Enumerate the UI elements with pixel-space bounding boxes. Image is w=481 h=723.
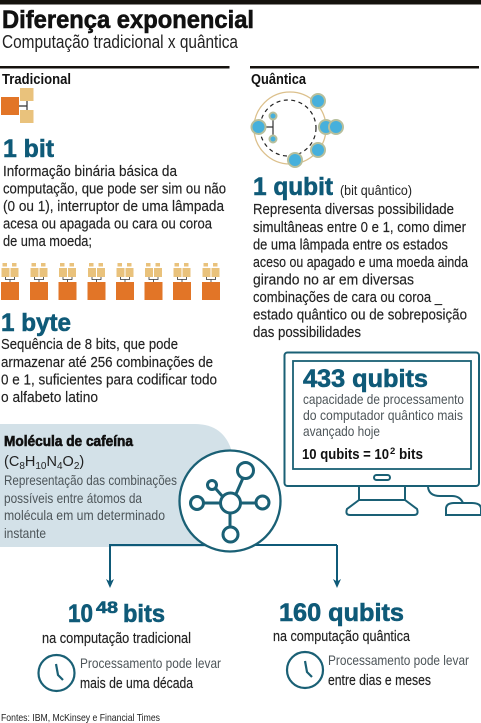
panel: monitor xyxy=(284,352,481,515)
text: traditional time xyxy=(80,655,221,692)
text: formula: O xyxy=(63,454,74,470)
heading: 10^48 bits: 48 xyxy=(96,598,118,617)
icon: clock xyxy=(38,655,74,691)
text: 1 bit description: acesa ou apagada ou cara ou coroa xyxy=(3,216,213,232)
text: formula: 4 xyxy=(57,461,63,472)
text: quantum time: entre dias e meses xyxy=(328,673,431,689)
heading: 1 byte: 1 byte xyxy=(1,309,71,337)
text: 1 bit description xyxy=(3,164,226,250)
text: 1 qubit description: combinações de cara ou coroa _ xyxy=(253,290,443,306)
text: 1 qubit description: simultâneas entre 0 e 1, como dimer xyxy=(253,220,466,236)
icon: eight bits row xyxy=(1,263,220,300)
top bar xyxy=(0,0,481,4)
text: formula: H xyxy=(25,454,35,470)
title: Diferença exponencial xyxy=(2,6,254,34)
text: equivalence: bits xyxy=(399,447,423,463)
panel: quantica xyxy=(250,66,479,341)
text: equivalence: 10 qubits = 10 xyxy=(302,447,389,463)
heading: 10^48 bits xyxy=(68,598,165,628)
heading: quantica: Quântica xyxy=(251,72,307,88)
icon: molecule xyxy=(180,450,280,552)
text: capacity: avançado hoje xyxy=(303,423,380,439)
text: 1 bit description: (0 ou 1), interruptor de uma lâmpada xyxy=(3,199,225,215)
icon: bit xyxy=(1,88,34,123)
text: caffeine description: molécula em um determinado xyxy=(4,507,165,523)
text: formula: ) xyxy=(79,454,84,470)
heading: 1 bit: 1 bit xyxy=(3,135,55,163)
text: 1 byte description xyxy=(1,337,217,406)
text: formula: (C xyxy=(4,454,19,470)
text: traditional label: na computação tradicional xyxy=(42,631,191,647)
text: 1 bit description: computação, que pode ser sim ou não xyxy=(3,182,226,198)
text: quantum time xyxy=(328,652,469,689)
text: bit quantico: (bit quântico) xyxy=(340,183,412,198)
heading: caffeine: Molécula de cafeína xyxy=(4,434,134,450)
text: 1 qubit description: girando no ar em diversas xyxy=(253,272,414,288)
heading: 1 qubit: 1 qubit xyxy=(253,173,334,201)
icon: qubit xyxy=(252,92,343,167)
text: 1 byte description: armazenar até 256 combinações de xyxy=(1,355,213,371)
text: caffeine description xyxy=(4,472,177,541)
text: traditional time: Processamento pode levar xyxy=(80,655,221,671)
text: 1 byte description: o alfabeto latino xyxy=(1,390,98,406)
text: 1 qubit description xyxy=(253,202,469,341)
icon: clock xyxy=(287,652,323,688)
arrows xyxy=(106,545,341,588)
heading: 10^48 bits: bits xyxy=(123,600,165,628)
text: formula: 10 xyxy=(35,461,47,472)
icon: monitor frame xyxy=(284,352,481,515)
panel: traditional result xyxy=(38,598,221,692)
text: 1 qubit description: de uma lâmpada entre os estados xyxy=(253,238,448,254)
text: equivalence: 2 xyxy=(390,446,395,457)
text: traditional time: mais de uma década xyxy=(80,676,194,692)
panel: quantum result xyxy=(273,599,469,689)
text: 1 byte description: Sequência de 8 bits, que pode xyxy=(1,337,178,353)
text: 1 bit description: Informação binária básica da xyxy=(3,164,178,180)
text: 1 qubit description: das possibilidades xyxy=(253,325,361,341)
heading: 433 qubits: 433 qubits xyxy=(303,365,428,393)
panel: caffeine xyxy=(0,424,232,547)
text: formula: 8 xyxy=(19,461,25,472)
heading: 10^48 bits: 10 xyxy=(68,600,93,628)
panel: tradicional xyxy=(0,66,230,406)
text: capacity xyxy=(303,391,464,439)
subtitle: Computação tradicional x quântica xyxy=(2,32,239,52)
text: formula: 2 xyxy=(74,461,80,472)
heading: tradicional: Tradicional xyxy=(2,72,71,88)
text: quantum label: na computação quântica xyxy=(273,629,411,645)
heading: 160 qubits: 160 qubits xyxy=(279,599,404,627)
text: 1 qubit description: Representa diversas possibilidade xyxy=(253,202,454,218)
text: caffeine description: instante xyxy=(4,525,46,541)
text: caffeine description: possíveis entre átomos da xyxy=(4,490,142,506)
text: 1 byte description: 0 e 1, suficientes para codificar todo xyxy=(1,372,217,388)
text: caffeine description: Representação das combinações xyxy=(4,472,177,488)
text: formula: N xyxy=(46,454,57,470)
text: 1 qubit description: estado quântico ou de sobreposição xyxy=(253,308,467,324)
text: 1 bit description: de uma moeda; xyxy=(3,234,92,250)
